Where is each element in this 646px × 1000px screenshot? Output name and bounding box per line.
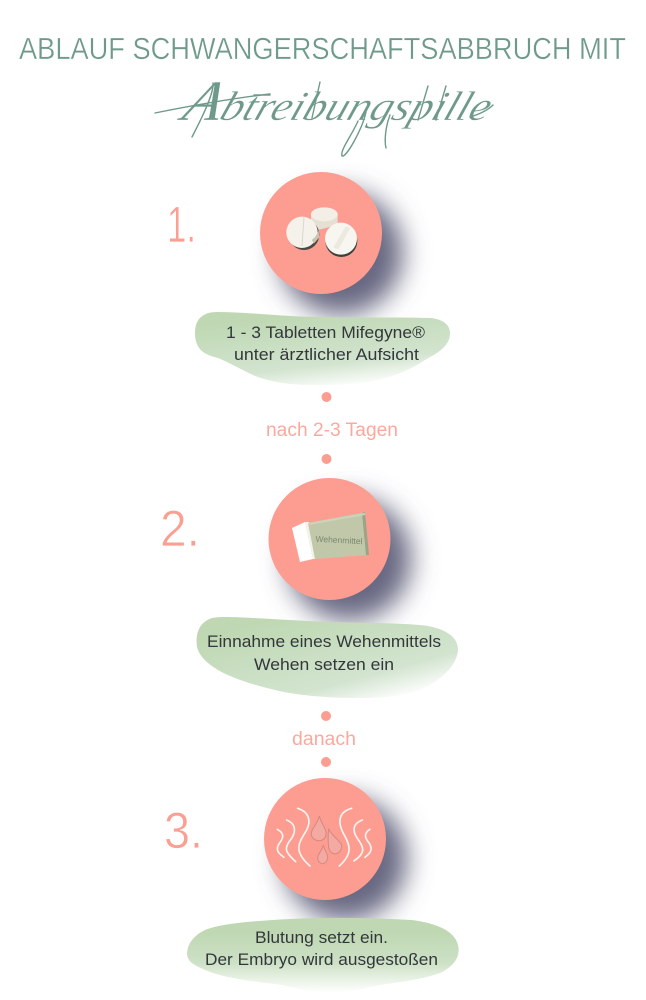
step 1 number: 1.: [167, 196, 196, 253]
connector dot: [321, 757, 331, 767]
step 2 circle with box: [268, 478, 412, 621]
step 3 circle with drops: [264, 778, 407, 921]
connector label: danach: [292, 729, 356, 750]
step 3 text blob: [187, 918, 459, 993]
connector dot: [322, 392, 332, 402]
step 1 text blob: unter ärztlicher Aufsicht: [234, 345, 419, 364]
step 1 text blob: 1 - 3 Tabletten Mifegyne®: [226, 323, 425, 342]
script subtitle: [155, 70, 504, 156]
connector dot: [321, 711, 331, 721]
step 3 number: 3.: [164, 802, 203, 859]
connector label: nach 2-3 Tagen: [266, 420, 398, 441]
connector dot: [322, 454, 332, 464]
step 1 text blob: [195, 312, 450, 385]
icon: blood drops and waves: [277, 808, 371, 866]
step 1 circle with pills: [260, 172, 403, 315]
step 2 text blob: Wehen setzen ein: [254, 655, 394, 674]
step 3 text blob: Blutung setzt ein.: [255, 928, 388, 947]
icon: Wehenmittel box: [292, 512, 369, 562]
step 2 text blob: Einnahme eines Wehenmittels: [207, 632, 441, 651]
step 3 text blob: Der Embryo wird ausgestoßen: [205, 950, 438, 969]
step 2 text blob: [197, 617, 458, 698]
step 2 number: 2.: [160, 500, 200, 557]
icon: Wehenmittel box: Wehenmittel: [315, 534, 363, 546]
icon: pills: [286, 207, 357, 257]
script subtitle: Abtreibungspille: [171, 70, 504, 133]
